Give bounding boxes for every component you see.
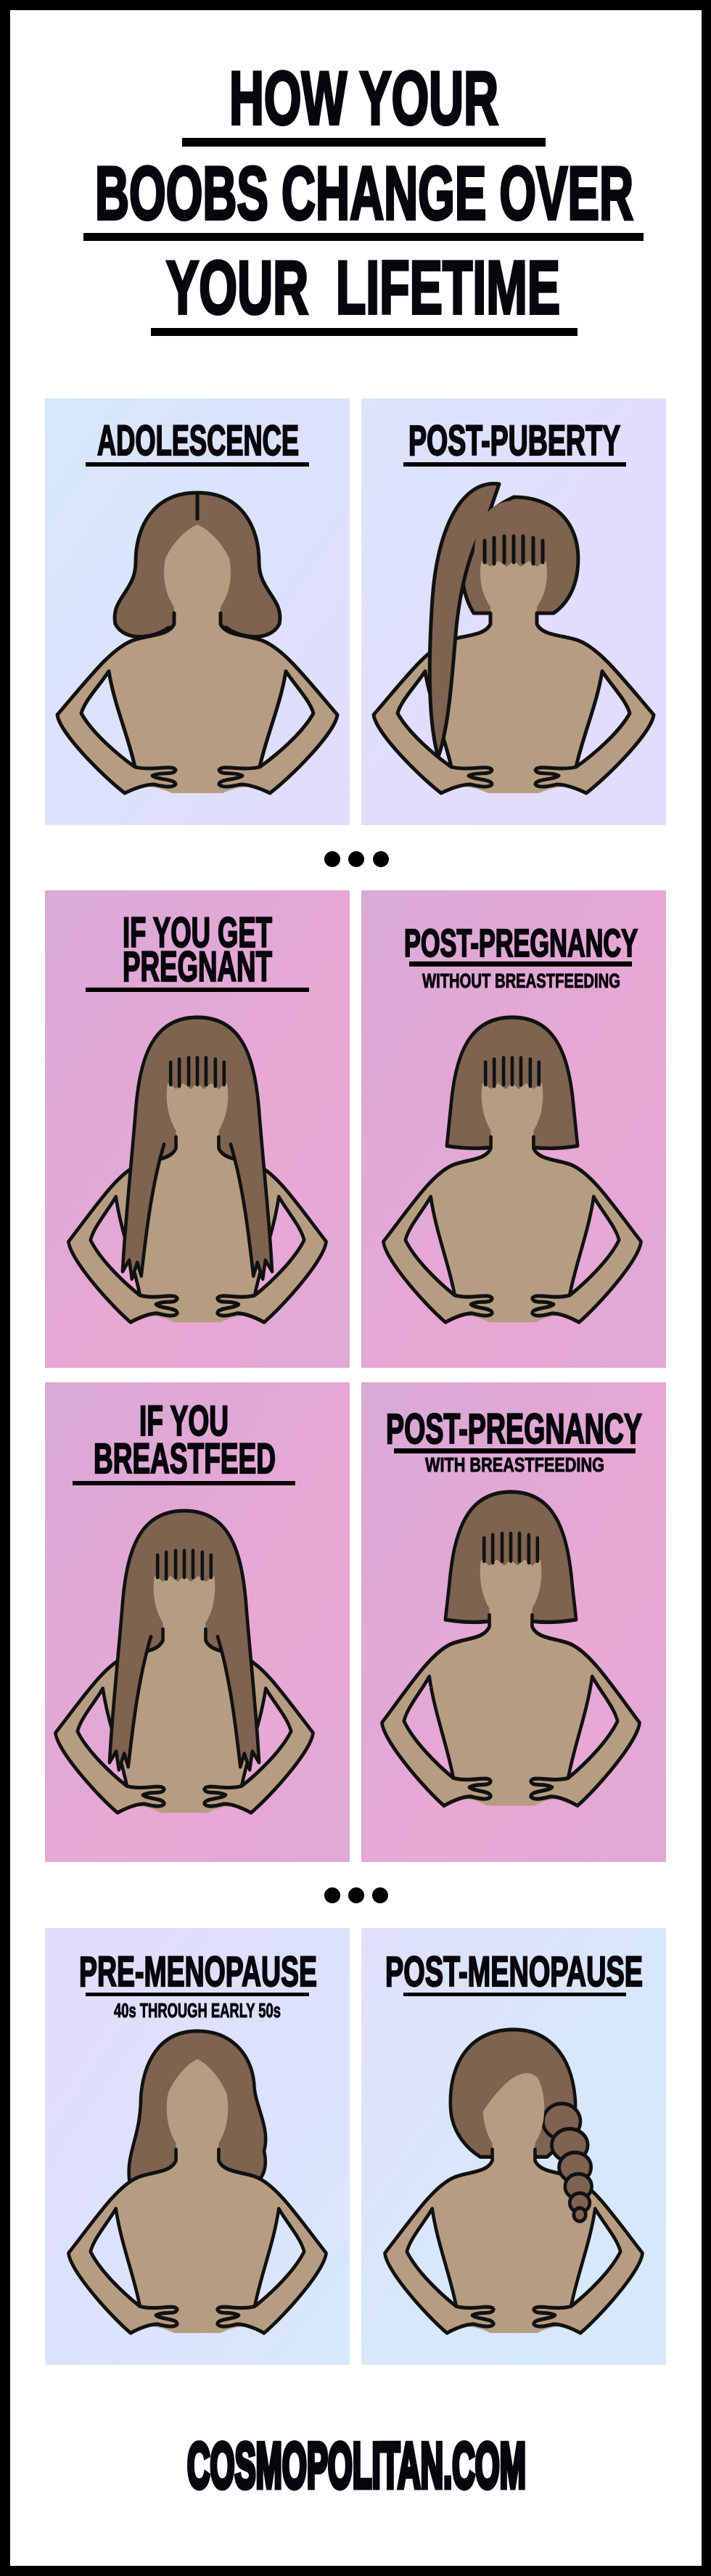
heading: adolescence: [86, 417, 309, 467]
heading: if you get pregnant: IF YOU GET: [123, 909, 272, 956]
figure: ponytail hair: [374, 483, 654, 793]
title: HOW YOUR: [229, 57, 498, 141]
heading: post-pregnancy without breastfeeding: [404, 922, 638, 992]
heading: adolescence: ADOLESCENCE: [97, 417, 299, 464]
title: [83, 57, 644, 336]
panel: if you get pregnant: [45, 890, 350, 1368]
heading: if you get pregnant: [86, 909, 309, 992]
heading: post-pregnancy with breastfeeding: [386, 1406, 642, 1476]
panel: if you breastfeed: [45, 1382, 350, 1862]
figure: long hair with bangs: [55, 1511, 313, 1813]
heading: post-puberty: [403, 417, 626, 467]
panel: adolescence: [45, 398, 350, 825]
figure: long hair with bangs: [68, 1017, 326, 1322]
panel: post-menopause: [361, 1928, 666, 2365]
panel: post-pregnancy without breastfeeding: [361, 890, 666, 1368]
heading: pre-menopause: PRE-MENOPAUSE: [79, 1948, 317, 1995]
ellipsis dots: [324, 1887, 388, 1903]
figure: shoulder-length hair with bangs: [382, 1492, 640, 1805]
heading: pre-menopause: 40s THROUGH EARLY 50s: [114, 1999, 281, 2022]
figure: side braid hair: [385, 2030, 643, 2333]
heading: post-pregnancy without breastfeeding: WITHOUT BREASTFEEDING: [422, 969, 620, 992]
heading: if you breastfeed: [73, 1398, 295, 1485]
heading: post-pregnancy with breastfeeding: WITH BREASTFEEDING: [425, 1453, 604, 1476]
heading: if you get pregnant: PREGNANT: [123, 943, 272, 990]
figure: wavy hair: [68, 2031, 326, 2333]
heading: if you breastfeed: BREASTFEED: [94, 1435, 276, 1482]
panel: post-pregnancy with breastfeeding: [361, 1382, 666, 1862]
icon: braid: [543, 2104, 592, 2221]
heading: pre-menopause: [79, 1948, 317, 2022]
heading: if you breastfeed: IF YOU: [139, 1398, 229, 1445]
figure: wavy bob hair: [57, 493, 337, 793]
panel: post-puberty: [361, 398, 666, 825]
panel: pre-menopause: [45, 1928, 350, 2365]
figure: shoulder-length hair with bangs: [383, 1017, 641, 1322]
ellipsis dots: [324, 851, 389, 867]
